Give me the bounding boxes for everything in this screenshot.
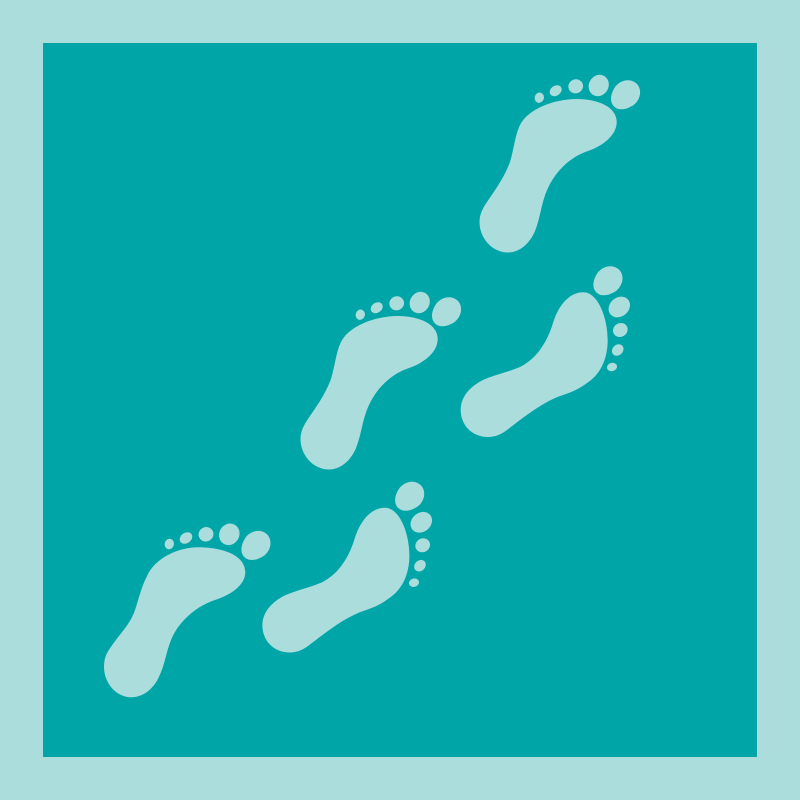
icon: footprint middle left <box>300 288 467 470</box>
teal panel <box>43 43 757 757</box>
icon: footprint bottom centre <box>262 476 436 652</box>
icon: footprint middle right <box>461 260 634 437</box>
icon: footprint bottom left <box>104 520 276 697</box>
icon: footprint top <box>480 71 646 252</box>
